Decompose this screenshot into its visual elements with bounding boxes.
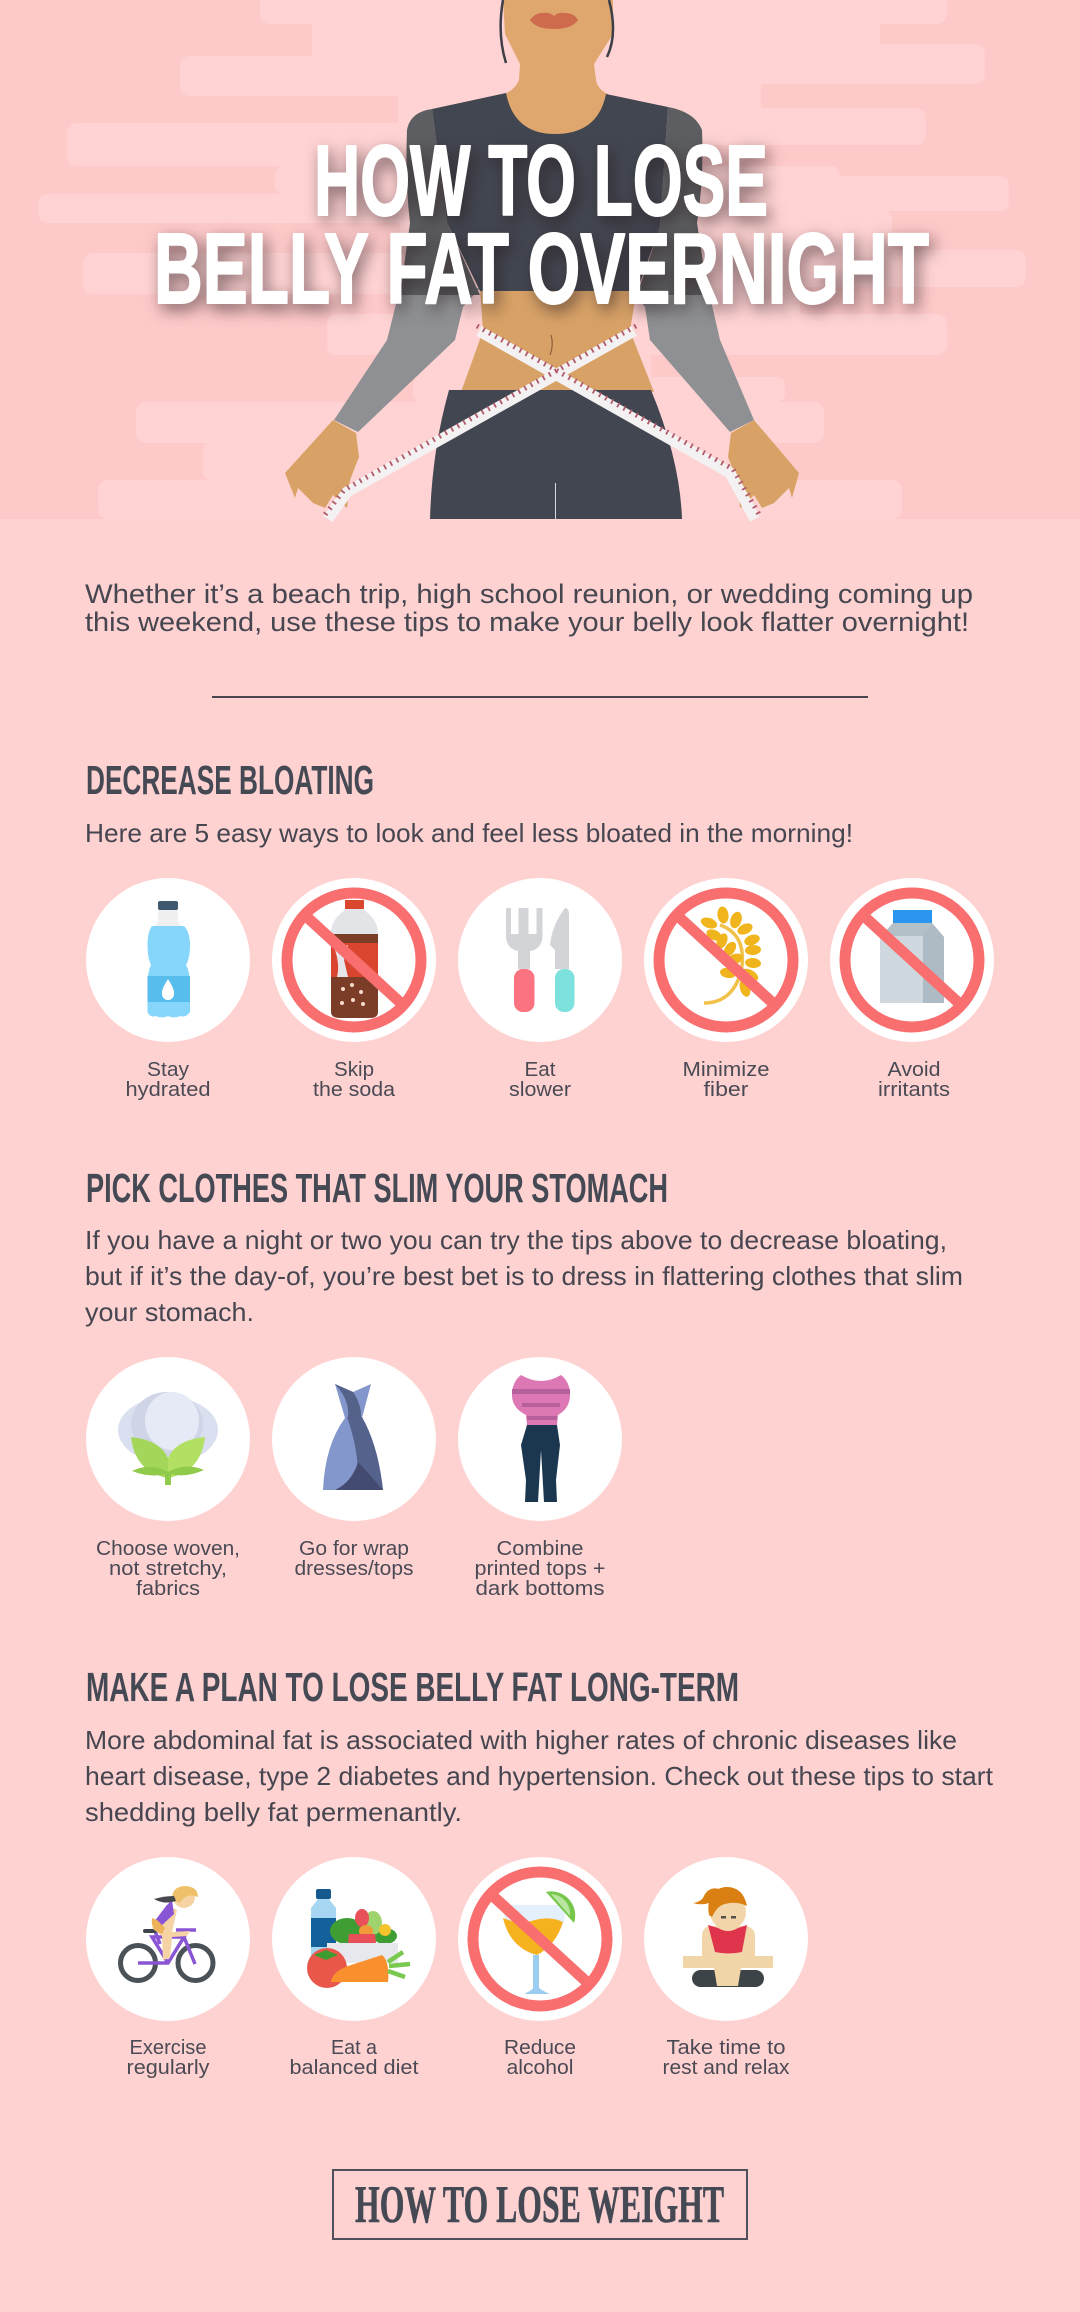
heading: PICK CLOTHES THAT SLIM YOUR STOMACH xyxy=(86,1165,668,1211)
label: regularly xyxy=(126,2057,210,2079)
label xyxy=(504,2037,576,2079)
label: irritants xyxy=(878,1079,950,1101)
icon: no alcohol xyxy=(458,1857,622,2021)
crop top xyxy=(432,93,668,291)
label: fabrics xyxy=(136,1578,200,1600)
icon: printed top and dark pants xyxy=(458,1357,622,1521)
icon: meditation xyxy=(644,1857,808,2021)
description: your stomach. xyxy=(85,1297,254,1327)
footer logo box: HOW TO LOSE WEIGHT xyxy=(355,2176,724,2234)
label xyxy=(313,1059,396,1101)
label xyxy=(509,1059,571,1101)
icon: no wheat fiber xyxy=(644,878,808,1042)
icon: balanced diet xyxy=(272,1857,436,2021)
label: Go for wrap xyxy=(299,1538,409,1560)
arms xyxy=(334,288,480,432)
label xyxy=(290,2037,419,2079)
label xyxy=(96,1538,240,1600)
torso xyxy=(461,288,654,392)
icon: cycling xyxy=(86,1857,250,2021)
intro text xyxy=(85,579,973,637)
label: Exercise xyxy=(130,2037,206,2059)
label: Choose woven, xyxy=(96,1538,240,1560)
pants xyxy=(430,390,682,519)
description xyxy=(85,1725,994,1827)
label: balanced diet xyxy=(290,2057,419,2079)
intro text: Whether it’s a beach trip, high school reunion, or wedding coming up xyxy=(85,579,973,609)
label: Eat xyxy=(524,1059,556,1081)
section: pick clothes xyxy=(85,1165,963,1600)
description: Here are 5 easy ways to look and feel less bloated in the morning! xyxy=(85,818,853,848)
icon: water bottle xyxy=(86,878,250,1042)
title: HOW TO LOSE xyxy=(314,125,768,237)
label xyxy=(126,2037,210,2079)
icon: cotton xyxy=(86,1357,250,1521)
label xyxy=(126,1059,210,1101)
label xyxy=(294,1538,414,1580)
measuring tape xyxy=(324,326,760,519)
label xyxy=(878,1059,950,1101)
section: long-term plan xyxy=(85,1664,994,2079)
icon: wrap dress xyxy=(272,1357,436,1521)
label: fiber xyxy=(704,1079,749,1101)
heading: DECREASE BLOATING xyxy=(86,757,374,803)
description: heart disease, type 2 diabetes and hypertension. Check out these tips to start xyxy=(85,1761,994,1791)
description: More abdominal fat is associated with higher rates of chronic diseases like xyxy=(85,1725,957,1755)
face and neck xyxy=(503,0,613,140)
description: shedding belly fat permenantly. xyxy=(85,1797,462,1827)
description xyxy=(85,1225,963,1327)
icon: fork and knife xyxy=(458,878,622,1042)
label xyxy=(682,1059,770,1101)
label: Avoid xyxy=(888,1059,940,1081)
label: rest and relax xyxy=(662,2057,790,2079)
label: Minimize xyxy=(682,1059,770,1081)
label: the soda xyxy=(313,1079,396,1101)
label: alcohol xyxy=(506,2057,574,2079)
label: hydrated xyxy=(126,1079,210,1101)
heading: MAKE A PLAN TO LOSE BELLY FAT LONG-TERM xyxy=(86,1664,739,1710)
label xyxy=(662,2037,790,2079)
label: not stretchy, xyxy=(109,1558,227,1580)
label: Reduce xyxy=(504,2037,576,2059)
label: dresses/tops xyxy=(294,1558,414,1580)
icon: no milk xyxy=(830,878,994,1042)
icon: no soda xyxy=(272,878,436,1042)
intro text: this weekend, use these tips to make your belly look flatter overnight! xyxy=(85,607,969,637)
label: Eat a xyxy=(331,2037,378,2059)
label: slower xyxy=(509,1079,571,1101)
label: Stay xyxy=(147,1059,189,1081)
hero banner xyxy=(0,0,1080,519)
description: If you have a night or two you can try the tips above to decrease bloating, xyxy=(85,1225,947,1255)
sleeves xyxy=(400,109,480,295)
illustration: woman with measuring tape xyxy=(285,0,799,519)
description: but if it’s the day-of, you’re best bet is to dress in flattering clothes that slim xyxy=(85,1261,963,1291)
section: decrease bloating xyxy=(85,757,994,1101)
footer logo box xyxy=(333,2170,747,2239)
label: dark bottoms xyxy=(476,1578,604,1600)
label: printed tops + xyxy=(474,1558,606,1580)
label: Take time to xyxy=(666,2037,786,2059)
label xyxy=(474,1538,606,1600)
label: Combine xyxy=(496,1538,584,1560)
title xyxy=(154,125,929,325)
hands xyxy=(285,420,359,508)
label: Skip xyxy=(334,1059,374,1081)
